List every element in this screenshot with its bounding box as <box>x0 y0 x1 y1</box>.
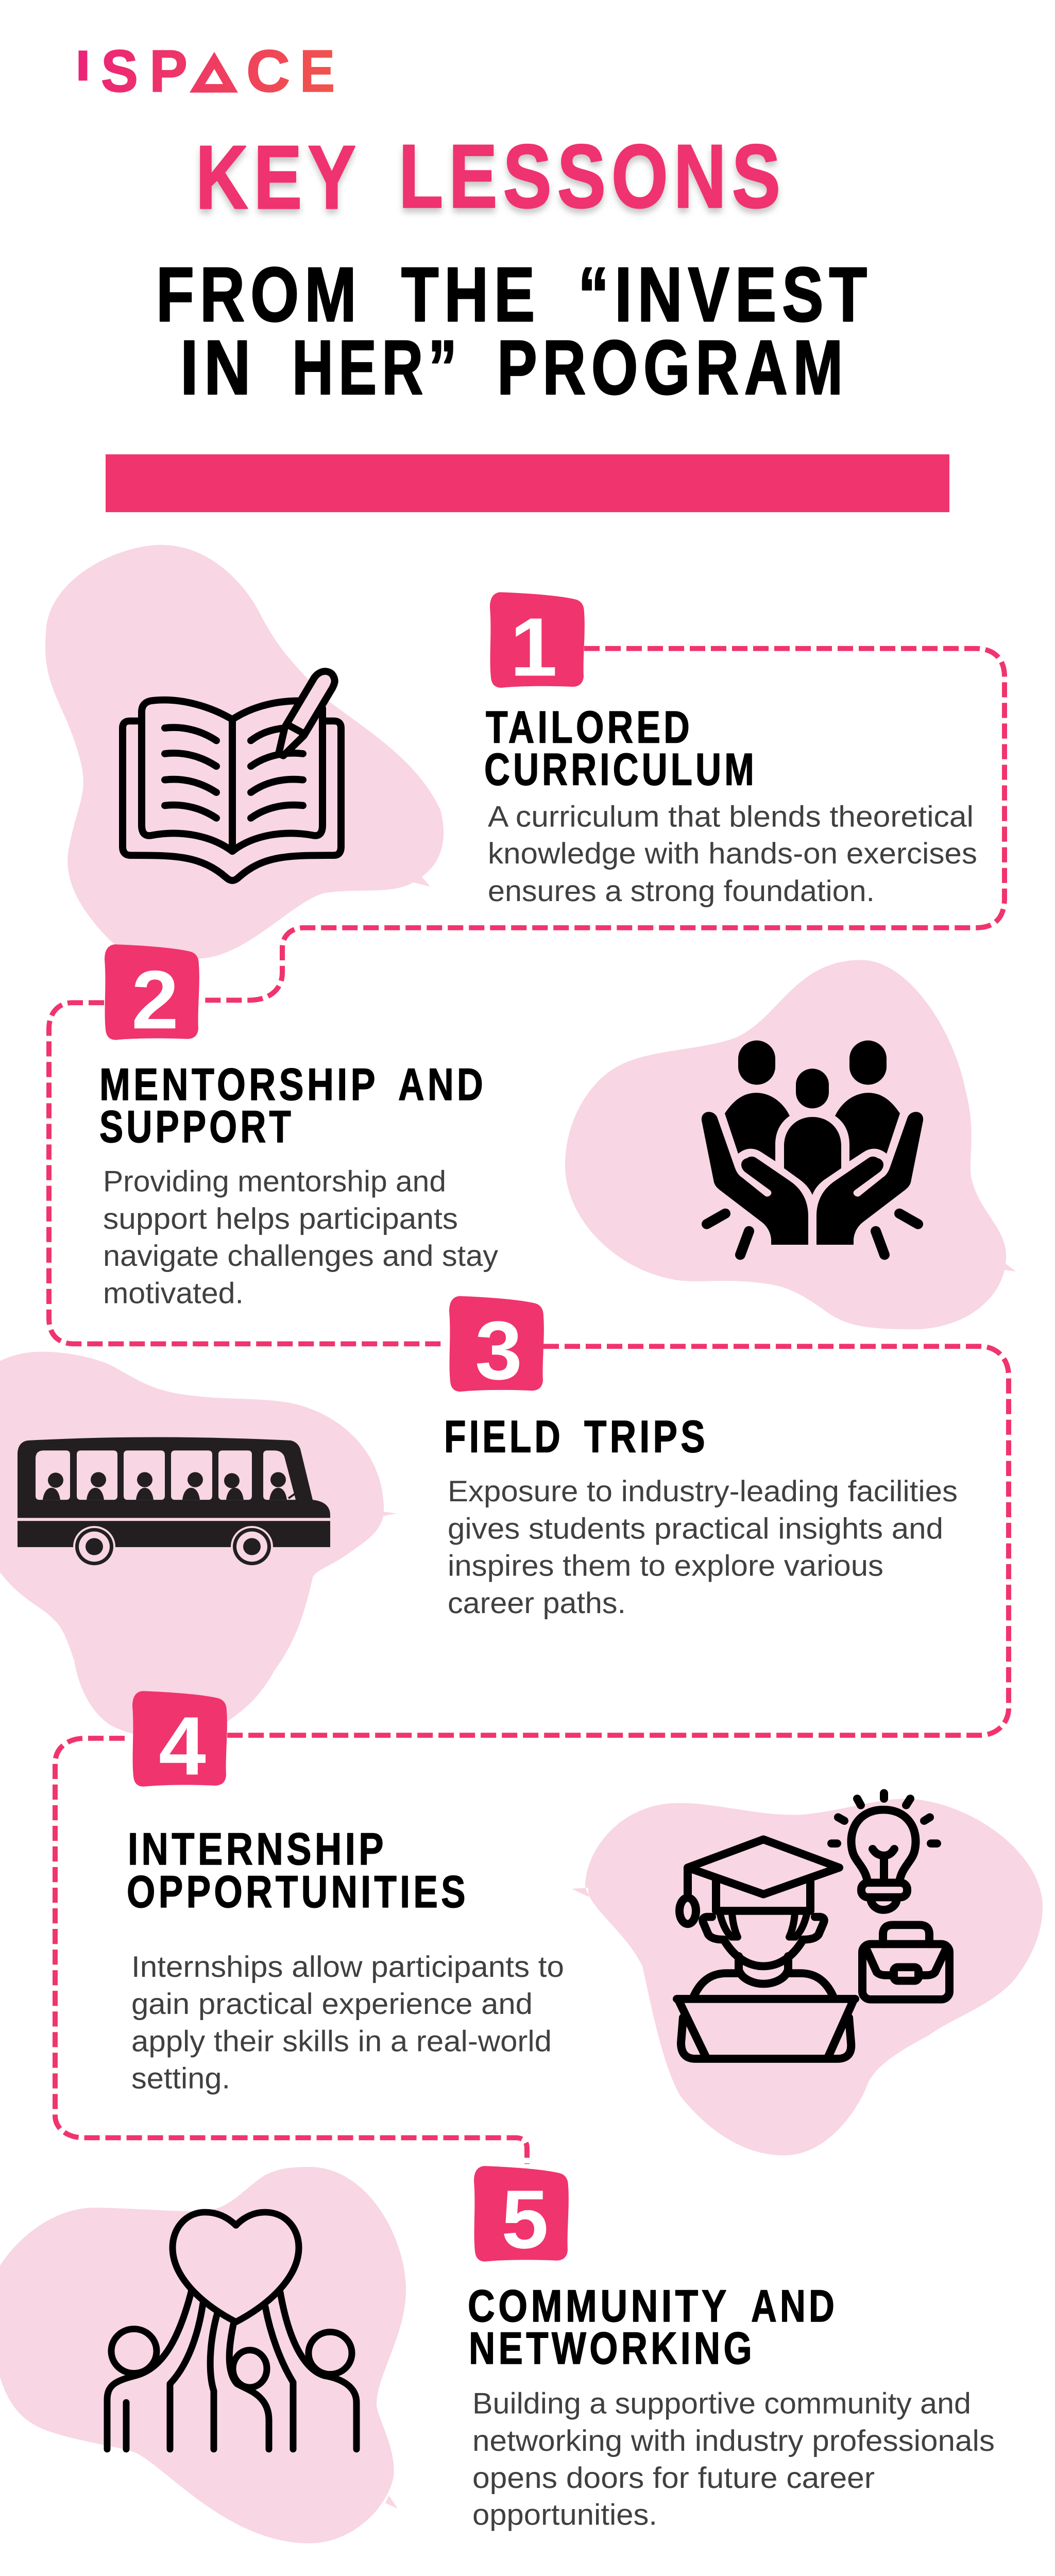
heading: community and networking: COMMUNITY <box>468 2281 730 2331</box>
heading: mentorship and support: MENTORSHIP <box>99 1060 379 1110</box>
body text 3: Exposure to industry-leading facilities <box>448 1475 958 1508</box>
background blob 4 <box>572 1799 1043 2156</box>
body text 3: gives students practical insights and <box>448 1512 943 1545</box>
body text 1 <box>488 800 977 908</box>
subtitle: from the invest in her program: “INVEST <box>578 251 873 337</box>
icon: graduate with laptop, light bulb and briefcase <box>677 1793 949 2059</box>
subtitle: from the invest in her program: HER” <box>292 325 462 411</box>
heading: community and networking: NETWORKING <box>469 2324 755 2374</box>
body text 2: Providing mentorship and <box>103 1165 446 1198</box>
heading: field trips: TRIPS <box>584 1412 708 1462</box>
badge 5 <box>474 2166 569 2262</box>
connector from 1 to 2 <box>202 649 1005 1000</box>
number 4: 4 <box>159 1700 206 1792</box>
body text 2 <box>103 1165 498 1310</box>
background blob 5 <box>0 2167 406 2544</box>
title: key lessons <box>196 126 786 227</box>
heading: internship opportunities <box>127 1824 469 1918</box>
icon: hands holding people <box>702 1041 923 1255</box>
body text 5: opens doors for future career <box>472 2461 875 2495</box>
body text 3: career paths. <box>448 1586 626 1620</box>
heading: internship opportunities: INTERNSHIP <box>128 1824 387 1875</box>
heading: mentorship and support <box>99 1060 486 1152</box>
body text 3 <box>448 1475 958 1620</box>
subtitle: from the invest in her program: FROM <box>156 251 362 337</box>
body text 3: inspires them to explore various <box>448 1549 883 1582</box>
number 1: 1 <box>510 601 557 693</box>
subtitle: from the invest in her program <box>156 251 873 411</box>
connector from 4 to 5 <box>55 1738 527 2164</box>
body text 1: A curriculum that blends theoretical <box>488 800 974 833</box>
logo: ISPACE: P <box>149 38 188 105</box>
panel: field trips <box>0 1296 958 1737</box>
logo: ISPACE: S <box>101 38 138 105</box>
badge 2 <box>105 944 199 1040</box>
panel: mentorship and support <box>99 944 1016 1329</box>
heading: community and networking <box>468 2281 838 2374</box>
body text 5 <box>472 2387 995 2531</box>
panel: internship opportunities <box>127 1691 1043 2156</box>
connector from 3 to 4 <box>227 1346 1009 1735</box>
background blob 1 <box>45 545 444 960</box>
heading: community and networking: AND <box>751 2281 838 2331</box>
panel: community and networking <box>0 2166 995 2544</box>
heading: mentorship and support: AND <box>398 1060 486 1110</box>
logo: ISPACE: E <box>300 38 335 105</box>
heading: mentorship and support: SUPPORT <box>99 1102 294 1152</box>
icon: school bus with passengers <box>18 1437 330 1567</box>
heading: internship opportunities: OPPORTUNITIES <box>127 1867 469 1918</box>
body text 4: gain practical experience and <box>131 1987 533 2021</box>
body text 5: networking with industry professionals <box>472 2424 995 2458</box>
body text 5: opportunities. <box>472 2498 657 2531</box>
connector from 2 to 3 <box>49 1003 444 1344</box>
body text 1: knowledge with hands-on exercises <box>488 837 977 870</box>
number 3: 3 <box>475 1304 522 1397</box>
heading: tailored curriculum: CURRICULUM <box>484 744 757 795</box>
body text 2: navigate challenges and stay <box>103 1239 498 1273</box>
body text 5: Building a supportive community and <box>472 2387 971 2420</box>
panel: tailored curriculum <box>45 545 977 960</box>
logo: ISPACE: C <box>246 38 290 105</box>
body text 2: support helps participants <box>103 1202 458 1235</box>
title: key lessons: LESSONS <box>399 126 786 226</box>
number 5: 5 <box>501 2173 549 2265</box>
badge 3 <box>449 1296 544 1392</box>
number 2: 2 <box>131 954 179 1046</box>
body text 4: Internships allow participants to <box>131 1950 564 1984</box>
background blob 3 <box>0 1352 397 1737</box>
icon: open book with pen <box>123 671 341 880</box>
heading: field trips: FIELD <box>444 1412 564 1462</box>
heading: tailored curriculum <box>484 702 757 795</box>
badge 1 <box>490 592 585 688</box>
heading: tailored curriculum: TAILORED <box>486 702 693 753</box>
icon: people lifting a heart <box>107 2212 356 2449</box>
connector: dashed path between steps <box>49 649 1009 2164</box>
logo: ISPACE <box>76 38 335 105</box>
badge 4 <box>132 1691 227 1787</box>
body text 1: ensures a strong foundation. <box>488 874 875 908</box>
background blob 2 <box>565 960 1016 1329</box>
heading: field trips <box>444 1412 708 1462</box>
title divider bar <box>106 454 949 512</box>
body text 4 <box>131 1950 564 2095</box>
title: key lessons: KEY <box>196 127 362 227</box>
body text 2: motivated. <box>103 1277 244 1310</box>
subtitle: from the invest in her program: PROGRAM <box>497 325 848 411</box>
body text 4: apply their skills in a real-world <box>131 2025 552 2058</box>
subtitle: from the invest in her program: IN <box>180 325 257 411</box>
body text 4: setting. <box>131 2062 230 2095</box>
subtitle: from the invest in her program: THE <box>401 251 540 337</box>
logo: ISPACE: I <box>76 42 90 89</box>
